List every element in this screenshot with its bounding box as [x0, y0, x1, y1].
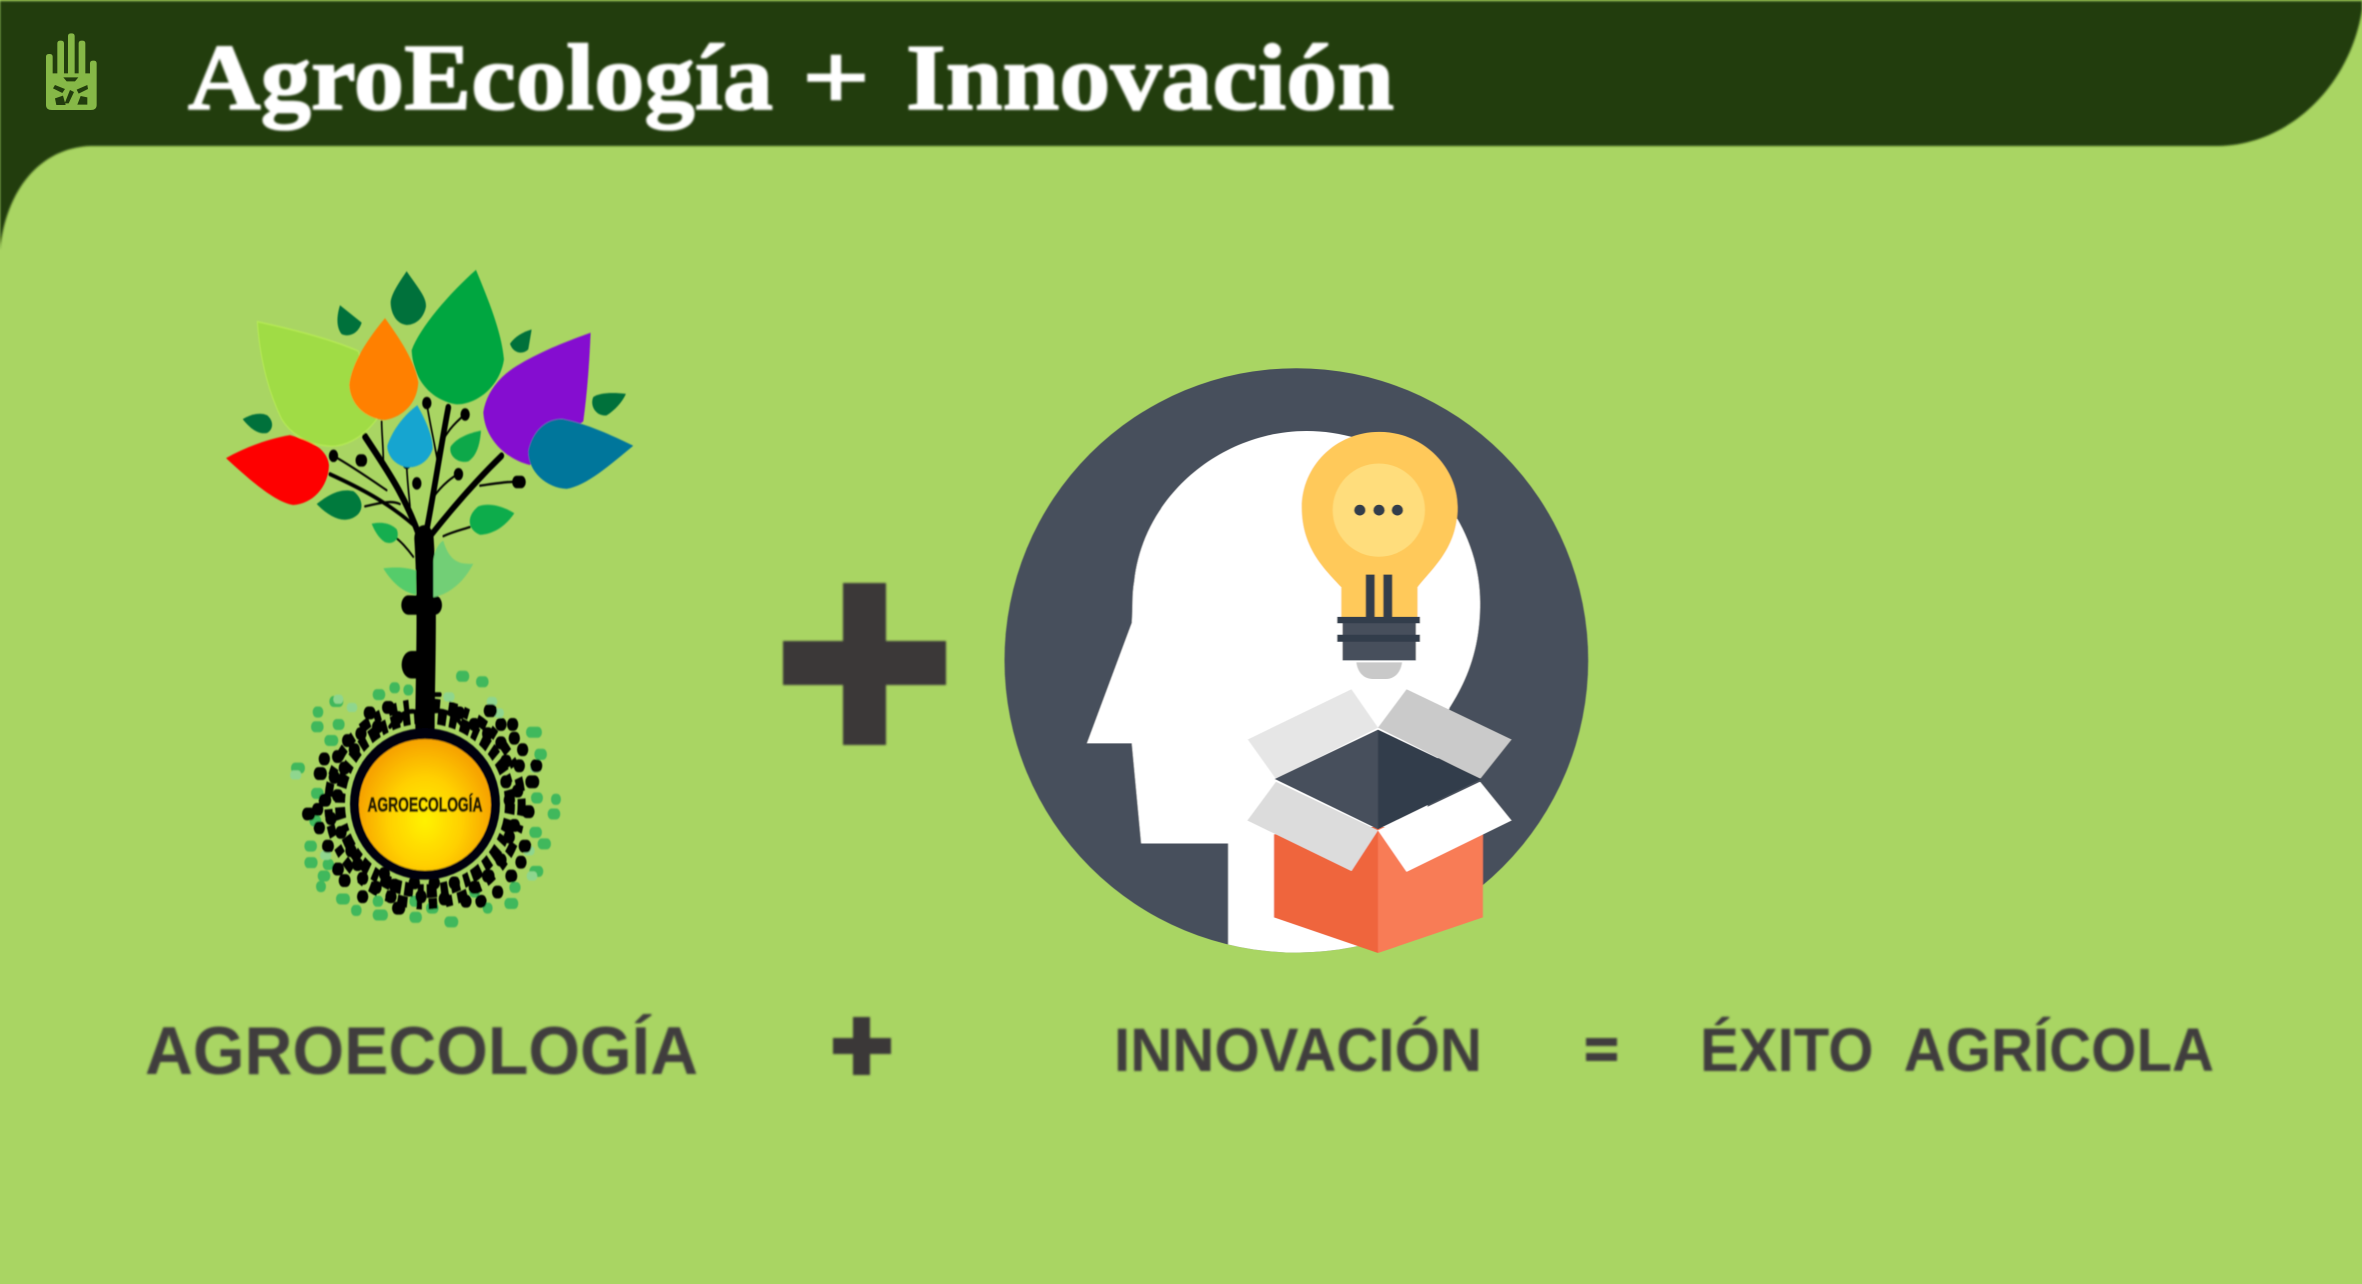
caption: exito agricola: ÉXITO AGRÍCOLA — [1700, 1016, 2214, 1084]
small plus sign — [833, 1017, 891, 1075]
black root network — [328, 704, 522, 904]
lime leaf — [257, 322, 377, 446]
blue leaf — [387, 405, 433, 467]
white head silhouette — [1087, 431, 1480, 983]
title: AgroEcología — [188, 26, 773, 130]
teal leaf — [528, 419, 633, 489]
big plus sign — [783, 583, 946, 745]
title: + — [802, 26, 870, 130]
orange seed circle — [350, 728, 500, 880]
title: Innovación — [906, 26, 1394, 130]
black root nodes — [307, 707, 538, 908]
green root speckles — [295, 676, 557, 922]
caption: agroecologia: AGROECOLOGÍA — [145, 1013, 698, 1089]
purple leaf — [483, 333, 591, 465]
icon: agroecology tree — [226, 270, 633, 922]
orange leaf — [349, 318, 418, 420]
caption: innovacion: INNOVACIÓN — [1114, 1016, 1482, 1084]
open box — [1247, 689, 1511, 953]
green leaf — [412, 270, 504, 404]
seed label: AGROECOLOGÍA — [367, 792, 483, 816]
icon: head with idea — [1004, 368, 1588, 983]
light bulb — [1302, 432, 1458, 679]
tree branches and trunk — [330, 403, 520, 727]
dark circle — [1004, 368, 1588, 953]
header band — [0, 1, 2362, 250]
branch buds — [333, 403, 521, 483]
red leaf — [226, 435, 329, 505]
small leaves — [243, 271, 626, 597]
title — [188, 26, 1394, 130]
equals sign — [1586, 1038, 1617, 1061]
icon: wheat hand logo — [46, 33, 97, 110]
